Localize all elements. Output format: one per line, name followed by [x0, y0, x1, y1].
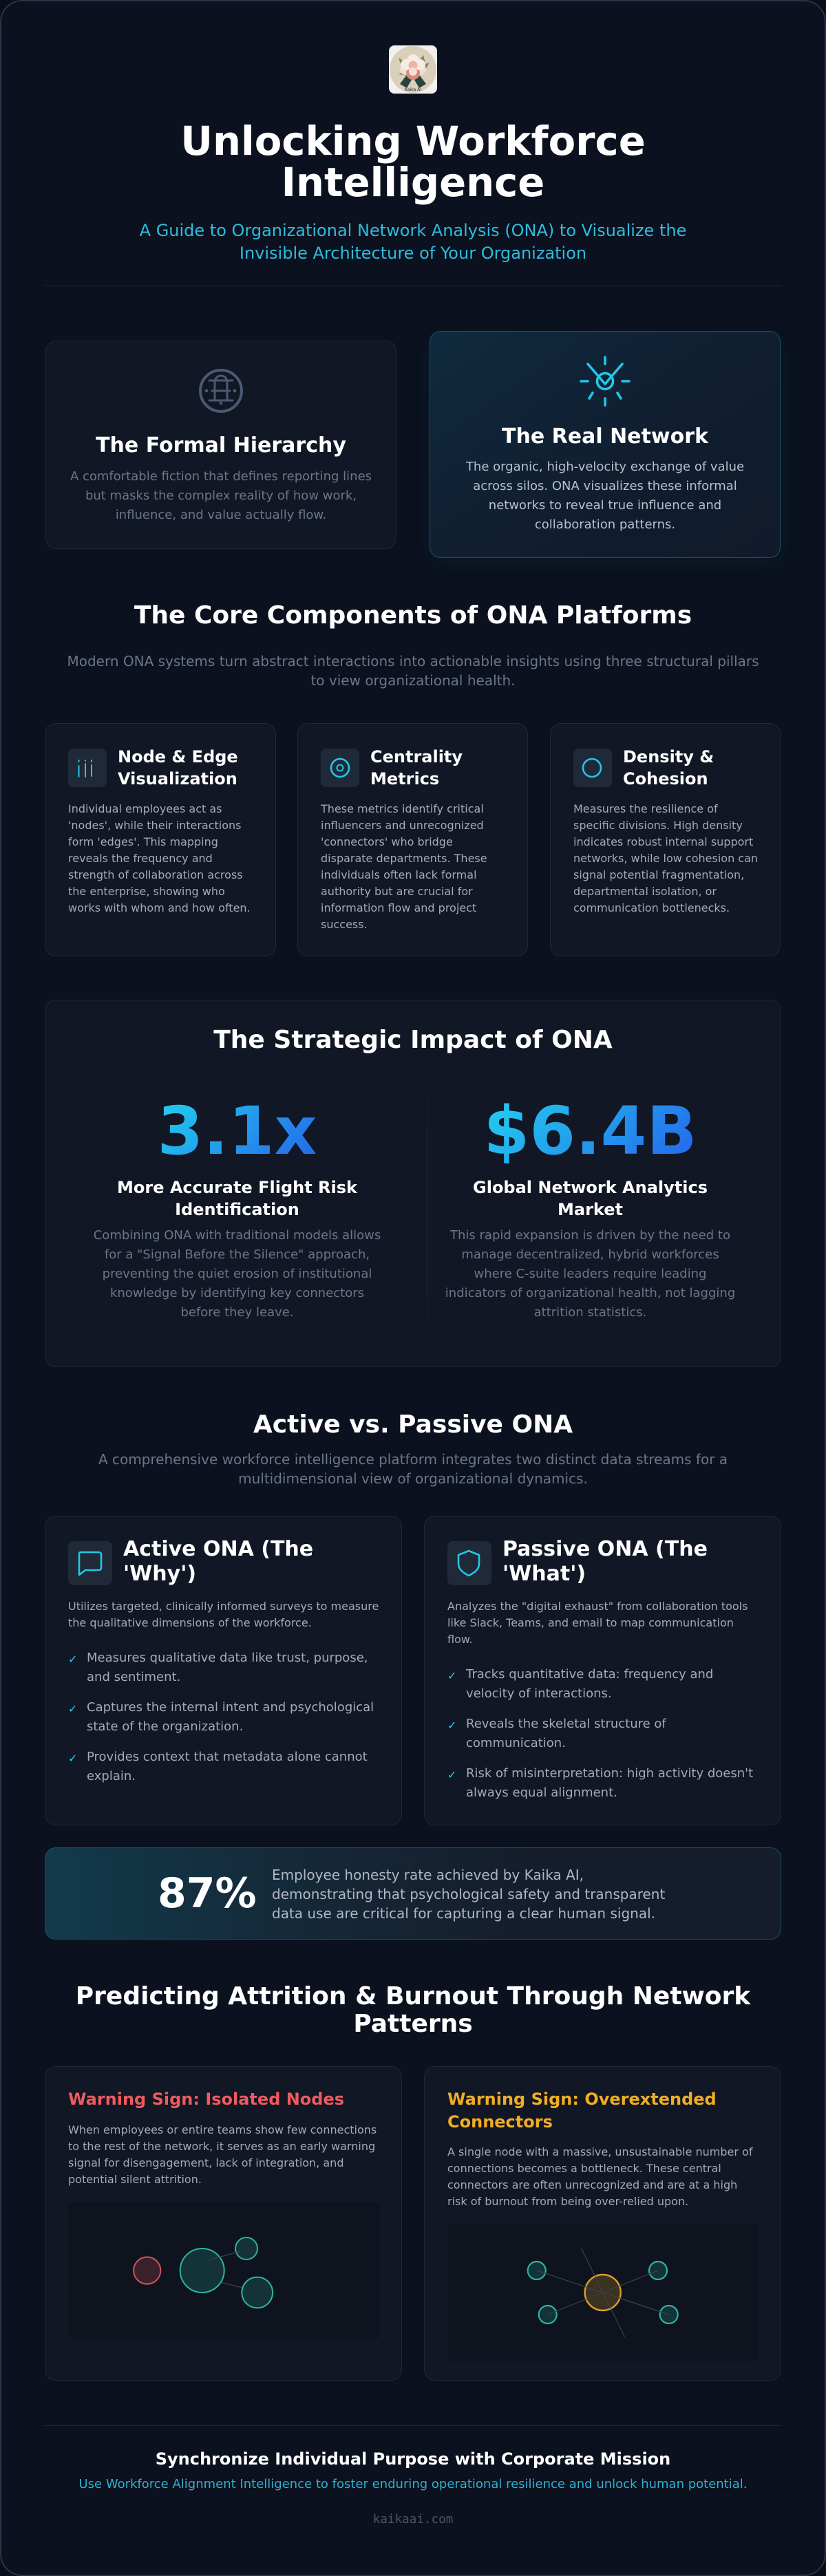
- callout text: data use are critical for capturing a clear human signal.: [272, 1905, 655, 1922]
- card body: [447, 2145, 753, 2208]
- list item: [87, 1651, 368, 1684]
- callout: 87% honesty rate: [45, 1847, 781, 1940]
- footer divider: [45, 2425, 781, 2426]
- card body: individuals often lack formal: [321, 868, 477, 881]
- panel: strategic impact: [45, 1000, 781, 1367]
- card body: success.: [321, 918, 368, 931]
- card heading: [370, 747, 463, 788]
- card body: like Slack, Teams, and email to map communication: [447, 1616, 734, 1629]
- card heading: [447, 2090, 717, 2132]
- icon: shield: [447, 1541, 491, 1585]
- card heading: Cohesion: [623, 769, 708, 788]
- panel: the real network: [430, 331, 781, 558]
- card heading: Warning Sign: Overextended: [447, 2090, 717, 2109]
- callout text: [272, 1867, 665, 1922]
- list item: [465, 1667, 713, 1701]
- card body: The organic, high-velocity exchange of value: [466, 460, 744, 474]
- logo: [389, 45, 437, 94]
- stat description: Combining ONA with traditional models allows: [94, 1228, 381, 1243]
- card body: strength of collaboration across: [68, 868, 243, 881]
- stat value: $6.4B: [483, 1093, 697, 1170]
- list item: Risk of misinterpretation: high activity doesn't: [466, 1766, 753, 1781]
- card body: signal for disengagement, lack of integration, and: [68, 2156, 343, 2169]
- card body: risk of burnout from being over-relied upon.: [447, 2195, 688, 2208]
- card body: across silos. ONA visualizes these informal: [473, 479, 737, 493]
- list item: Captures the internal intent and psychological: [87, 1700, 374, 1715]
- heading: strategic impact: The Strategic Impact of ONA: [213, 1026, 613, 1054]
- list item: Tracks quantitative data: frequency and: [466, 1667, 713, 1682]
- footer headline: Synchronize Individual Purpose with Corporate Mission: [156, 2449, 670, 2469]
- list item: state of the organization.: [87, 1719, 243, 1734]
- title: Unlocking Workforce: [180, 118, 646, 164]
- callout figure: 87%: [158, 1869, 257, 1918]
- stat description: for a "Signal Before the Silence" approach,: [105, 1247, 370, 1262]
- stat description: knowledge by identifying key connectors: [110, 1286, 364, 1300]
- title: [180, 118, 646, 206]
- stat description: manage decentralized, hybrid workforces: [461, 1247, 719, 1262]
- card body: collaboration patterns.: [535, 517, 675, 532]
- panel: isolated nodes: [45, 2066, 402, 2381]
- list item: [87, 1750, 368, 1783]
- stat description: before they leave.: [180, 1305, 294, 1320]
- card body: disparate departments. These: [321, 852, 487, 865]
- icon: bars: [68, 749, 107, 787]
- list item: [466, 1766, 753, 1800]
- card body: [321, 802, 487, 931]
- card body: but masks the complex reality of how work,: [85, 489, 357, 503]
- subtitle: A Guide to Organizational Network Analysis (ONA) to Visualize the: [140, 221, 686, 240]
- card heading: [623, 747, 714, 788]
- card body: [68, 802, 251, 914]
- heading: predicting attrition: Predicting Attrition & Burnout Through Network: [76, 1982, 750, 2010]
- card body: A single node with a massive, unsustainable number of: [447, 2145, 752, 2158]
- stat description: attrition statistics.: [534, 1305, 646, 1320]
- card body: [465, 460, 744, 532]
- check mark: ✓: [68, 1653, 77, 1666]
- panel: overextended connectors: [424, 2066, 781, 2381]
- core components intro: [67, 653, 759, 689]
- list: active points: [68, 1651, 374, 1783]
- card body: information flow and project: [321, 901, 476, 914]
- title: Intelligence: [282, 160, 544, 206]
- card body: 'connectors' who bridge: [321, 835, 453, 848]
- card body: influence, and value actually flow.: [116, 508, 326, 522]
- panel: node and edge: [45, 723, 276, 956]
- card body: [68, 2123, 377, 2186]
- list item: Measures qualitative data like trust, purpose,: [87, 1651, 368, 1665]
- list item: [87, 1700, 374, 1734]
- icon: target: [321, 749, 359, 787]
- check mark: ✓: [68, 1752, 77, 1765]
- active vs passive intro: [98, 1451, 728, 1487]
- list item: Reveals the skeletal structure of: [466, 1717, 666, 1731]
- icon: monogram seal: [199, 369, 243, 413]
- card heading: Connectors: [447, 2112, 553, 2132]
- card heading: Active ONA (The: [123, 1537, 313, 1561]
- footer tagline: Use Workforce Alignment Intelligence to foster enduring operational resilience and unlock human potential.: [78, 2477, 748, 2491]
- card body: A comfortable fiction that defines reporting lines: [70, 469, 372, 484]
- panel: centrality metrics: [297, 723, 528, 956]
- stat description: indicators of organizational health, not lagging: [445, 1286, 735, 1300]
- core components intro: to view organizational health.: [310, 672, 516, 689]
- active vs passive intro: A comprehensive workforce intelligence platform integrates two distinct data streams for a: [98, 1451, 728, 1468]
- heading: predicting attrition: Patterns: [353, 2010, 473, 2038]
- card body: [68, 1600, 379, 1629]
- card body: specific divisions. High density: [573, 819, 743, 832]
- list item: and sentiment.: [87, 1670, 180, 1684]
- stat label: Market: [558, 1200, 623, 1219]
- card body: Measures the resilience of: [573, 802, 718, 815]
- card body: When employees or entire teams show few connections: [68, 2123, 377, 2136]
- card heading: [118, 747, 238, 788]
- card heading: Warning Sign: Isolated Nodes: [68, 2090, 344, 2109]
- subtitle: [139, 221, 686, 263]
- card heading: 'What'): [502, 1562, 586, 1586]
- card body: potential silent attrition.: [68, 2173, 202, 2186]
- card body: These metrics identify critical: [321, 802, 484, 815]
- card heading: Passive ONA (The: [502, 1537, 708, 1561]
- card body: [447, 1600, 748, 1646]
- list item: Provides context that metadata alone cannot: [87, 1750, 368, 1764]
- list item: velocity of interactions.: [466, 1686, 612, 1701]
- panel: density and cohesion: [550, 723, 781, 956]
- stat description: preventing the quiet erosion of institutional: [103, 1267, 372, 1281]
- card heading: Centrality: [370, 747, 463, 766]
- card body: connections becomes a bottleneck. These central: [447, 2162, 721, 2175]
- card body: 'nodes', while their interactions: [68, 819, 242, 832]
- card body: indicates robust internal support: [573, 835, 753, 848]
- check mark: ✓: [68, 1702, 77, 1715]
- stat description: This rapid expansion is driven by the need to: [450, 1228, 730, 1243]
- check mark: ✓: [447, 1669, 456, 1682]
- callout text: Employee honesty rate achieved by Kaika AI,: [272, 1867, 584, 1883]
- card heading: Node & Edge: [118, 747, 238, 766]
- card heading: The Real Network: [502, 425, 708, 449]
- subtitle: Invisible Architecture of Your Organization: [240, 244, 586, 263]
- icon: speech bubble: [68, 1541, 112, 1585]
- card body: connectors are often unrecognized and are at a high: [447, 2178, 737, 2191]
- card body: influencers and unrecognized: [321, 819, 484, 832]
- check mark: ✓: [447, 1719, 456, 1732]
- card heading: [502, 1537, 708, 1586]
- card body: [70, 469, 372, 522]
- panel: active ONA: [45, 1516, 402, 1825]
- card body: departmental isolation, or: [573, 885, 717, 898]
- card body: the qualitative dimensions of the workforce.: [68, 1616, 312, 1629]
- list item: communication.: [466, 1736, 566, 1750]
- card body: to the rest of the network, it serves as an early warning: [68, 2140, 375, 2153]
- card body: reveals the frequency and: [68, 852, 213, 865]
- card heading: Density &: [623, 747, 714, 766]
- panel: the formal hierarchy: [45, 341, 396, 549]
- diagram: isolated nodes: [68, 2202, 380, 2339]
- stat label: [117, 1178, 358, 1219]
- active vs passive intro: multidimensional view of organizational dynamics.: [238, 1470, 588, 1487]
- logo: Kaika AI: [405, 87, 421, 92]
- stat description: where C-suite leaders require leading: [474, 1267, 706, 1281]
- card heading: Visualization: [118, 769, 237, 788]
- card heading: [123, 1537, 313, 1586]
- card body: communication bottlenecks.: [573, 901, 730, 914]
- card body: form 'edges'. This mapping: [68, 835, 218, 848]
- stat label: Identification: [175, 1200, 299, 1219]
- card body: the enterprise, showing who: [68, 885, 225, 898]
- list item: explain.: [87, 1769, 136, 1783]
- card body: [573, 802, 758, 914]
- list: passive points: [447, 1667, 753, 1800]
- footer url: kaikaai.com: [373, 2513, 453, 2526]
- card body: Analyzes the "digital exhaust" from collaboration tools: [447, 1600, 748, 1613]
- stat: $6.4B: [445, 1093, 735, 1320]
- stat label: More Accurate Flight Risk: [117, 1178, 357, 1197]
- card body: authority but are crucial for: [321, 885, 473, 898]
- card body: networks, while low cohesion can: [573, 852, 758, 865]
- icon: network spark: [580, 356, 631, 407]
- check mark: ✓: [447, 1768, 456, 1781]
- callout text: demonstrating that psychological safety and transparent: [272, 1886, 665, 1902]
- diagram: overextended connector: [447, 2224, 759, 2361]
- icon: ring: [573, 749, 612, 787]
- stat label: [473, 1178, 708, 1219]
- list item: [466, 1717, 666, 1750]
- card body: flow.: [447, 1633, 473, 1646]
- heading: core components: The Core Components of ONA Platforms: [134, 601, 692, 630]
- stat: 3.1x: [94, 1093, 381, 1320]
- stat description: [94, 1228, 381, 1320]
- stat value: 3.1x: [157, 1093, 317, 1170]
- heading: active vs passive: Active vs. Passive ONA: [253, 1410, 573, 1439]
- card body: signal potential fragmentation,: [573, 868, 744, 881]
- core components intro: Modern ONA systems turn abstract interactions into actionable insights using three structural pillars: [67, 653, 759, 669]
- card body: Utilizes targeted, clinically informed surveys to measure: [68, 1600, 379, 1613]
- card body: networks to reveal true influence and: [489, 498, 721, 513]
- stat description: [445, 1228, 735, 1320]
- card heading: 'Why'): [123, 1562, 196, 1586]
- panel: passive ONA: [424, 1516, 781, 1825]
- heading: predicting attrition: [76, 1982, 751, 2038]
- card heading: Metrics: [370, 769, 439, 788]
- stat label: Global Network Analytics: [473, 1178, 708, 1197]
- card heading: The Formal Hierarchy: [96, 433, 346, 458]
- list item: always equal alignment.: [466, 1785, 617, 1800]
- card body: Individual employees act as: [68, 802, 222, 815]
- card body: works with whom and how often.: [68, 901, 251, 914]
